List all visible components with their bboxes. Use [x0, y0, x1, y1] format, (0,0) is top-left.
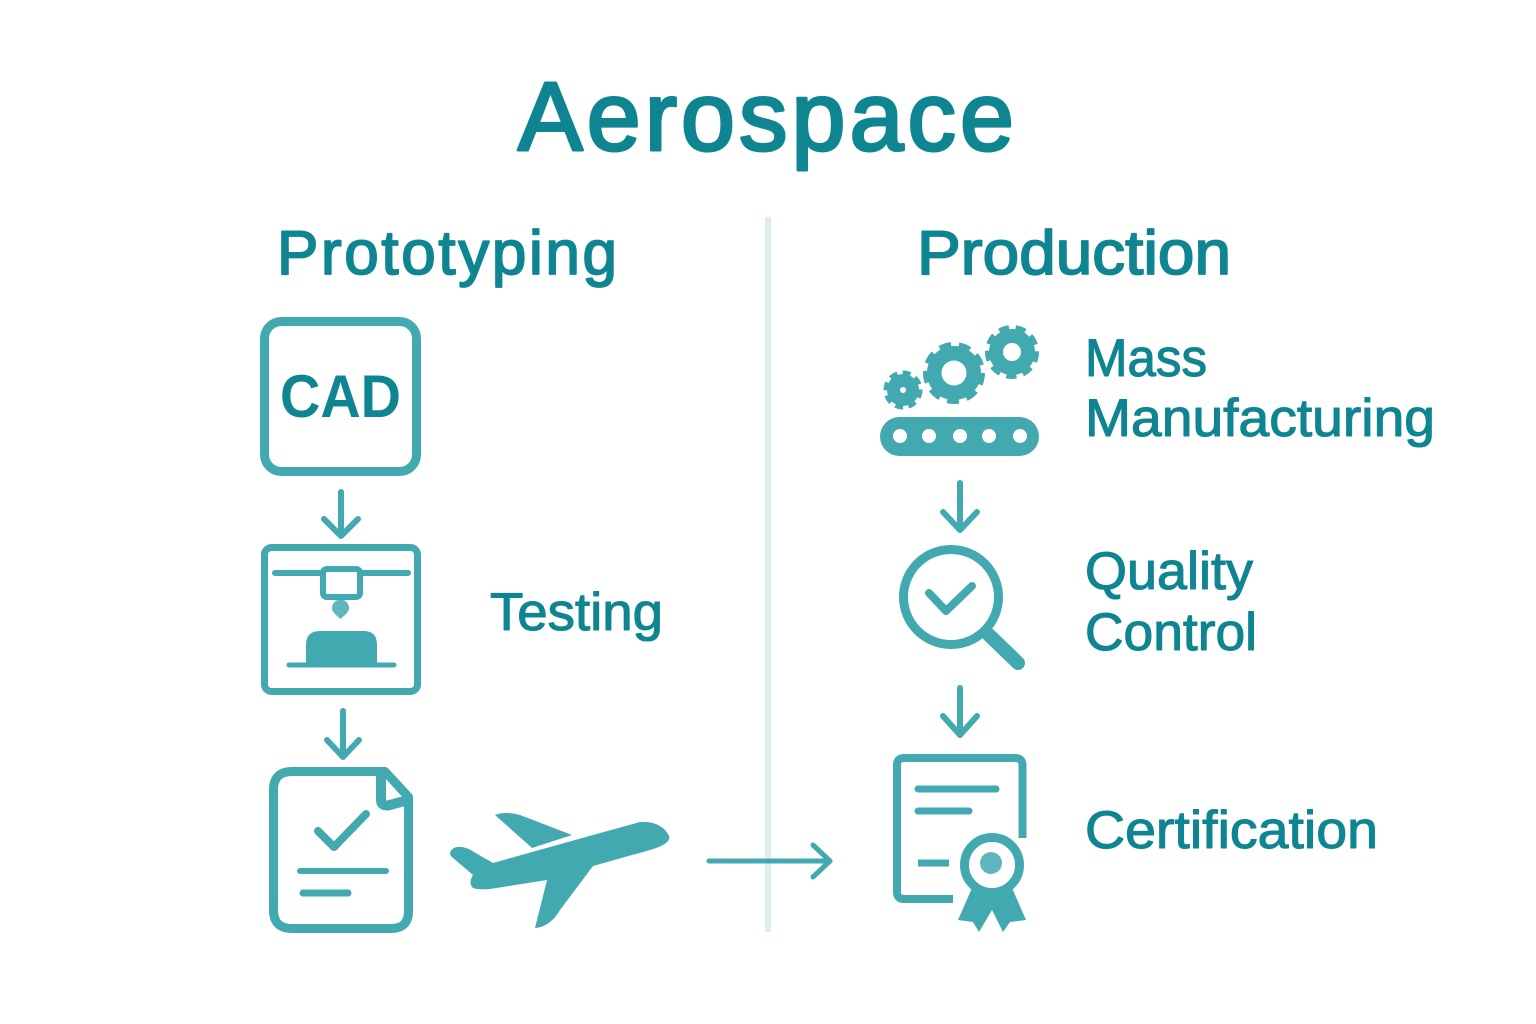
label: quality control: Control [1085, 603, 1257, 662]
arrow: quality control to certification [943, 688, 977, 735]
arrow: manufacturing to quality control [943, 483, 977, 530]
icon: certificate with rosette [897, 758, 1026, 932]
label: mass manufacturing [1085, 329, 1435, 448]
label: quality control [1085, 542, 1257, 662]
icon: CAD box [264, 322, 416, 472]
label: testing: Testing [490, 583, 663, 642]
panel: production [880, 219, 1435, 932]
title: Aerospace [518, 62, 1014, 171]
icon: 3D printer [264, 548, 418, 692]
heading: prototyping: Prototyping [277, 219, 617, 288]
label: certification: Certification [1085, 801, 1378, 860]
label: quality control: Quality [1085, 542, 1254, 601]
icon: CAD box: CAD [280, 363, 401, 430]
arrow: 3D printer to document [327, 711, 359, 757]
arrow: prototyping to production [709, 845, 830, 877]
heading: production: Production [917, 219, 1231, 288]
icon: test document [274, 772, 408, 928]
panel: prototyping [264, 219, 669, 928]
icon: magnifier with check [904, 550, 1018, 663]
label: mass manufacturing: Manufacturing [1085, 389, 1435, 448]
icon: airplane [450, 813, 669, 928]
arrow: CAD to 3D printer [324, 492, 358, 536]
divider [765, 217, 771, 932]
icon: gears and conveyor [880, 328, 1039, 456]
label: mass manufacturing: Mass [1085, 329, 1207, 388]
